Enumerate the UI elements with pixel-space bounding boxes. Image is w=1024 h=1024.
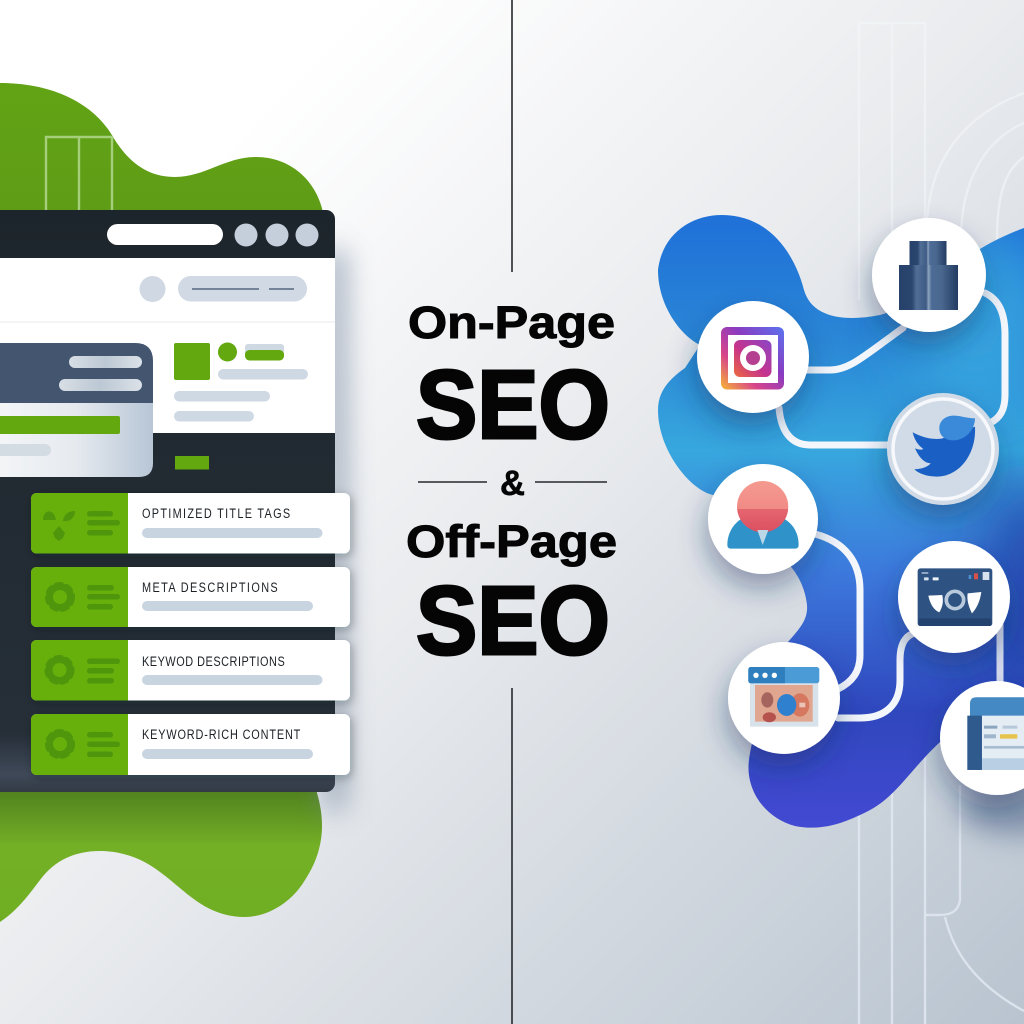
checklist row: meta descriptions bbox=[31, 567, 350, 627]
browser window shadow bbox=[325, 250, 345, 810]
icon: twitter bird bbox=[913, 416, 975, 477]
icon: instagram logo bbox=[721, 327, 784, 390]
checklist row: optimized title tags: OPTIMIZED TITLE TAGS bbox=[142, 506, 290, 521]
green blob on-page backdrop bbox=[0, 83, 323, 922]
node: picture window bbox=[728, 642, 840, 754]
node: instagram bbox=[697, 301, 809, 413]
icon: site layout bbox=[967, 697, 1024, 770]
network connectors bbox=[779, 293, 1005, 718]
background outline pattern right bbox=[859, 23, 1024, 1024]
checklist row: optimized title tags bbox=[31, 493, 350, 554]
icon: buildings bbox=[899, 241, 958, 310]
icon: text lines bbox=[87, 732, 120, 757]
small green button bbox=[175, 456, 209, 470]
icon: leaves and diamond bbox=[43, 511, 75, 541]
checklist row: keyword descriptions: KEYWOD DESCRIPTIONS bbox=[142, 654, 285, 669]
address bar pill bbox=[107, 224, 223, 245]
ampersand with rules: & bbox=[500, 464, 525, 503]
icon: video browser bbox=[918, 568, 992, 626]
title line: SEO bottom: SEO bbox=[416, 566, 610, 675]
icon: text lines bbox=[87, 658, 120, 684]
hero card bbox=[0, 343, 153, 477]
page nav avatar and search bbox=[140, 276, 307, 302]
browser window on-page bbox=[0, 210, 335, 792]
icon: picture window bbox=[748, 667, 819, 727]
bottom right shadow bbox=[960, 784, 1024, 836]
title bbox=[406, 297, 617, 675]
white page area bbox=[0, 258, 335, 433]
node: twitter bbox=[887, 393, 999, 505]
icon: text lines bbox=[87, 511, 120, 536]
checklist row: meta descriptions: META DESCRIPTIONS bbox=[142, 580, 278, 595]
checklist row: keyword-rich content bbox=[31, 714, 350, 775]
checklist row: keyword descriptions bbox=[31, 640, 350, 700]
central divider lines bbox=[511, 0, 513, 1024]
title line: Off-Page: Off-Page bbox=[406, 516, 617, 567]
window control dots bbox=[234, 224, 318, 246]
icon: gear bbox=[46, 730, 74, 758]
icon: gear bbox=[46, 656, 73, 684]
checklist row: keyword-rich content: KEYWORD-RICH CONTENT bbox=[142, 727, 301, 742]
title line: On-Page: On-Page bbox=[408, 297, 615, 348]
node: person bbox=[708, 464, 818, 574]
icon: person avatar bbox=[727, 481, 799, 549]
node: building bbox=[872, 218, 986, 332]
blob lighter upper right bbox=[905, 230, 1024, 410]
node: browser app bbox=[898, 541, 1010, 653]
outline columns in green blob bbox=[46, 137, 112, 212]
icon: text lines bbox=[87, 585, 120, 610]
blue blob off-page backdrop bbox=[650, 215, 1024, 835]
node: site layout bbox=[940, 681, 1024, 795]
icon: gear bbox=[46, 584, 74, 610]
title line: SEO top: SEO bbox=[416, 350, 610, 459]
blob darker right edge bbox=[980, 480, 1024, 700]
content thumbnail and lines bbox=[174, 342, 308, 422]
